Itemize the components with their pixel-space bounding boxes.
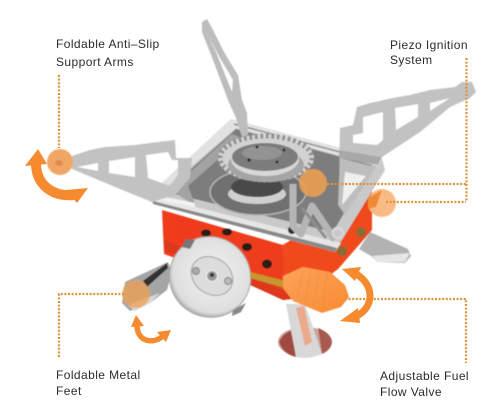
leader: fuel valve: [345, 299, 466, 363]
arrow: foot rotation: [131, 315, 171, 342]
left support arm: [72, 140, 192, 202]
label: metal feet: Foldable Metal: [56, 368, 141, 382]
highlight: foot: [122, 280, 150, 308]
leader: support arms: [58, 75, 60, 148]
arrow: support arm rotation: [25, 149, 88, 203]
back right foot: [359, 232, 411, 263]
highlight: ignition: [299, 169, 327, 197]
label: fuel valve: Flow Valve: [380, 385, 442, 399]
highlight: rear knob: [368, 189, 396, 217]
front foot: [278, 304, 332, 358]
label: metal feet: Feet: [56, 384, 82, 398]
right support arm: [339, 82, 476, 175]
label: piezo ignition: System: [390, 53, 433, 67]
arrow: valve rotation: [340, 267, 370, 323]
label: piezo ignition: Piezo Ignition: [390, 38, 468, 52]
leader: piezo ignition: [327, 58, 466, 202]
pivot pin: [55, 160, 63, 166]
tray: [150, 119, 385, 252]
label: support arms: Support Arms: [56, 55, 134, 69]
left foot stem: [122, 262, 172, 311]
orange valve knob: [283, 267, 349, 313]
burner: [218, 134, 314, 182]
top support arm: [202, 19, 248, 137]
foot disc: [153, 221, 267, 333]
red body: [162, 188, 372, 300]
label: support arms: Foldable Anti–Slip: [56, 37, 160, 51]
brass rod: [250, 272, 286, 288]
leader lines: [59, 58, 466, 363]
stove illustration: [47, 19, 476, 358]
label: fuel valve: Adjustable Fuel: [380, 369, 469, 383]
burner plate: [210, 169, 306, 215]
leader: metal feet: [59, 294, 124, 358]
rotation arrows: [25, 149, 370, 342]
ignition bracket: [293, 184, 343, 240]
highlight: left pivot: [47, 149, 73, 175]
